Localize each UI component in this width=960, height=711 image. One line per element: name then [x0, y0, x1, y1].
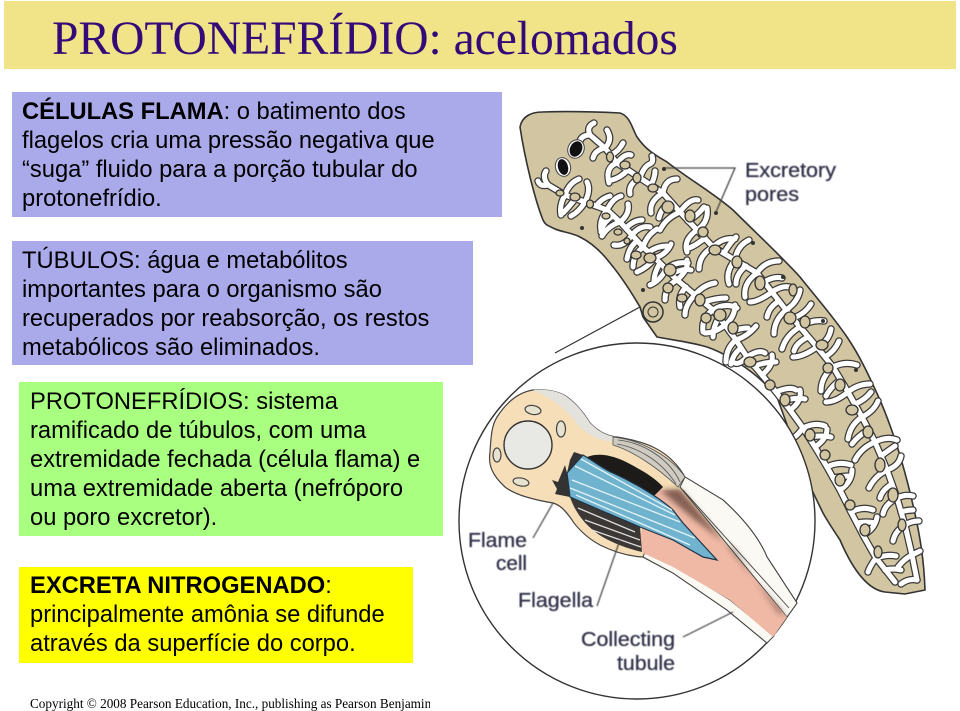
- magnifier circle: [459, 343, 815, 699]
- panel: túbulos: TÚBULOS: água e metabólitos: [22, 248, 348, 274]
- label: flame cell: Flame: [468, 530, 527, 552]
- lumen pink: [640, 490, 787, 637]
- label: flame cell: [468, 503, 553, 575]
- eyes: [553, 137, 587, 178]
- title: PROTONEFRÍDIO: acelomados: [52, 13, 678, 65]
- panel: protonefrídios: PROTONEFRÍDIOS: sistema: [30, 389, 338, 415]
- label: collecting tubule: [581, 612, 733, 675]
- dark chamber: [587, 455, 663, 500]
- panel: células flama: CÉLULAS FLAMA: o batimento dos: [22, 99, 406, 125]
- label: excretory pores: [665, 160, 836, 212]
- panel: excreta nitrogenado: [19, 567, 413, 663]
- panel: células flama: [12, 92, 502, 217]
- label: collecting tubule: tubule: [617, 653, 675, 675]
- flatworm: [520, 112, 925, 594]
- cell organelles: [493, 404, 566, 487]
- panel: excreta nitrogenado: através da superfície do corpo.: [30, 631, 356, 657]
- panel: protonefrídios: [19, 382, 443, 536]
- lower flagella hatch: [570, 497, 642, 552]
- label: flame cell: cell: [496, 553, 527, 575]
- blue flagella: [567, 455, 717, 560]
- lower wall: [643, 552, 774, 643]
- tubule white wall: [680, 477, 797, 617]
- panel: túbulos: recuperados por reabsorção, os restos: [22, 306, 429, 332]
- panel: células flama: “suga” fluido para a porção tubular do: [22, 157, 418, 183]
- title banner: [4, 1, 956, 69]
- worm body: [520, 112, 925, 594]
- network loops: [556, 152, 906, 558]
- flagella tuft: [552, 452, 583, 497]
- nucleus: [504, 421, 552, 469]
- panel: túbulos: metabólicos são eliminados.: [22, 335, 320, 361]
- cell body and tubule wall: [490, 390, 797, 643]
- label: flagella: [518, 540, 620, 612]
- panel: protonefrídios: uma extremidade aberta (nefróporo: [30, 476, 403, 502]
- flame cell: [490, 390, 797, 643]
- panel: protonefrídios: extremidade fechada (célula flama) e: [30, 447, 420, 473]
- upper wall shading: [533, 390, 617, 441]
- label: excretory pores: Excretory: [745, 160, 836, 182]
- panel: protonefrídios: ramificado de túbulos, com uma: [30, 418, 366, 444]
- lumen shading: [660, 489, 786, 616]
- panel: túbulos: importantes para o organismo são: [22, 277, 382, 303]
- panel: células flama: flagelos cria uma pressão negativa que: [22, 128, 435, 154]
- upper hatch: [613, 437, 685, 487]
- excretory pore marks: [580, 167, 858, 372]
- small locator circle and connector lines: [555, 302, 663, 353]
- panel: túbulos: [12, 241, 473, 365]
- label: excretory pores: pores: [745, 184, 799, 206]
- panel: protonefrídios: ou poro excretor).: [30, 505, 217, 531]
- label: flagella: Flagella: [518, 590, 594, 612]
- label: collecting tubule: Collecting: [581, 629, 675, 651]
- excretory network: [538, 123, 920, 584]
- panel: excreta nitrogenado: principalmente amônia se difunde: [30, 602, 385, 628]
- panel: células flama: protonefrídio.: [22, 186, 162, 212]
- panel: excreta nitrogenado: EXCRETA NITROGENADO:: [30, 573, 332, 599]
